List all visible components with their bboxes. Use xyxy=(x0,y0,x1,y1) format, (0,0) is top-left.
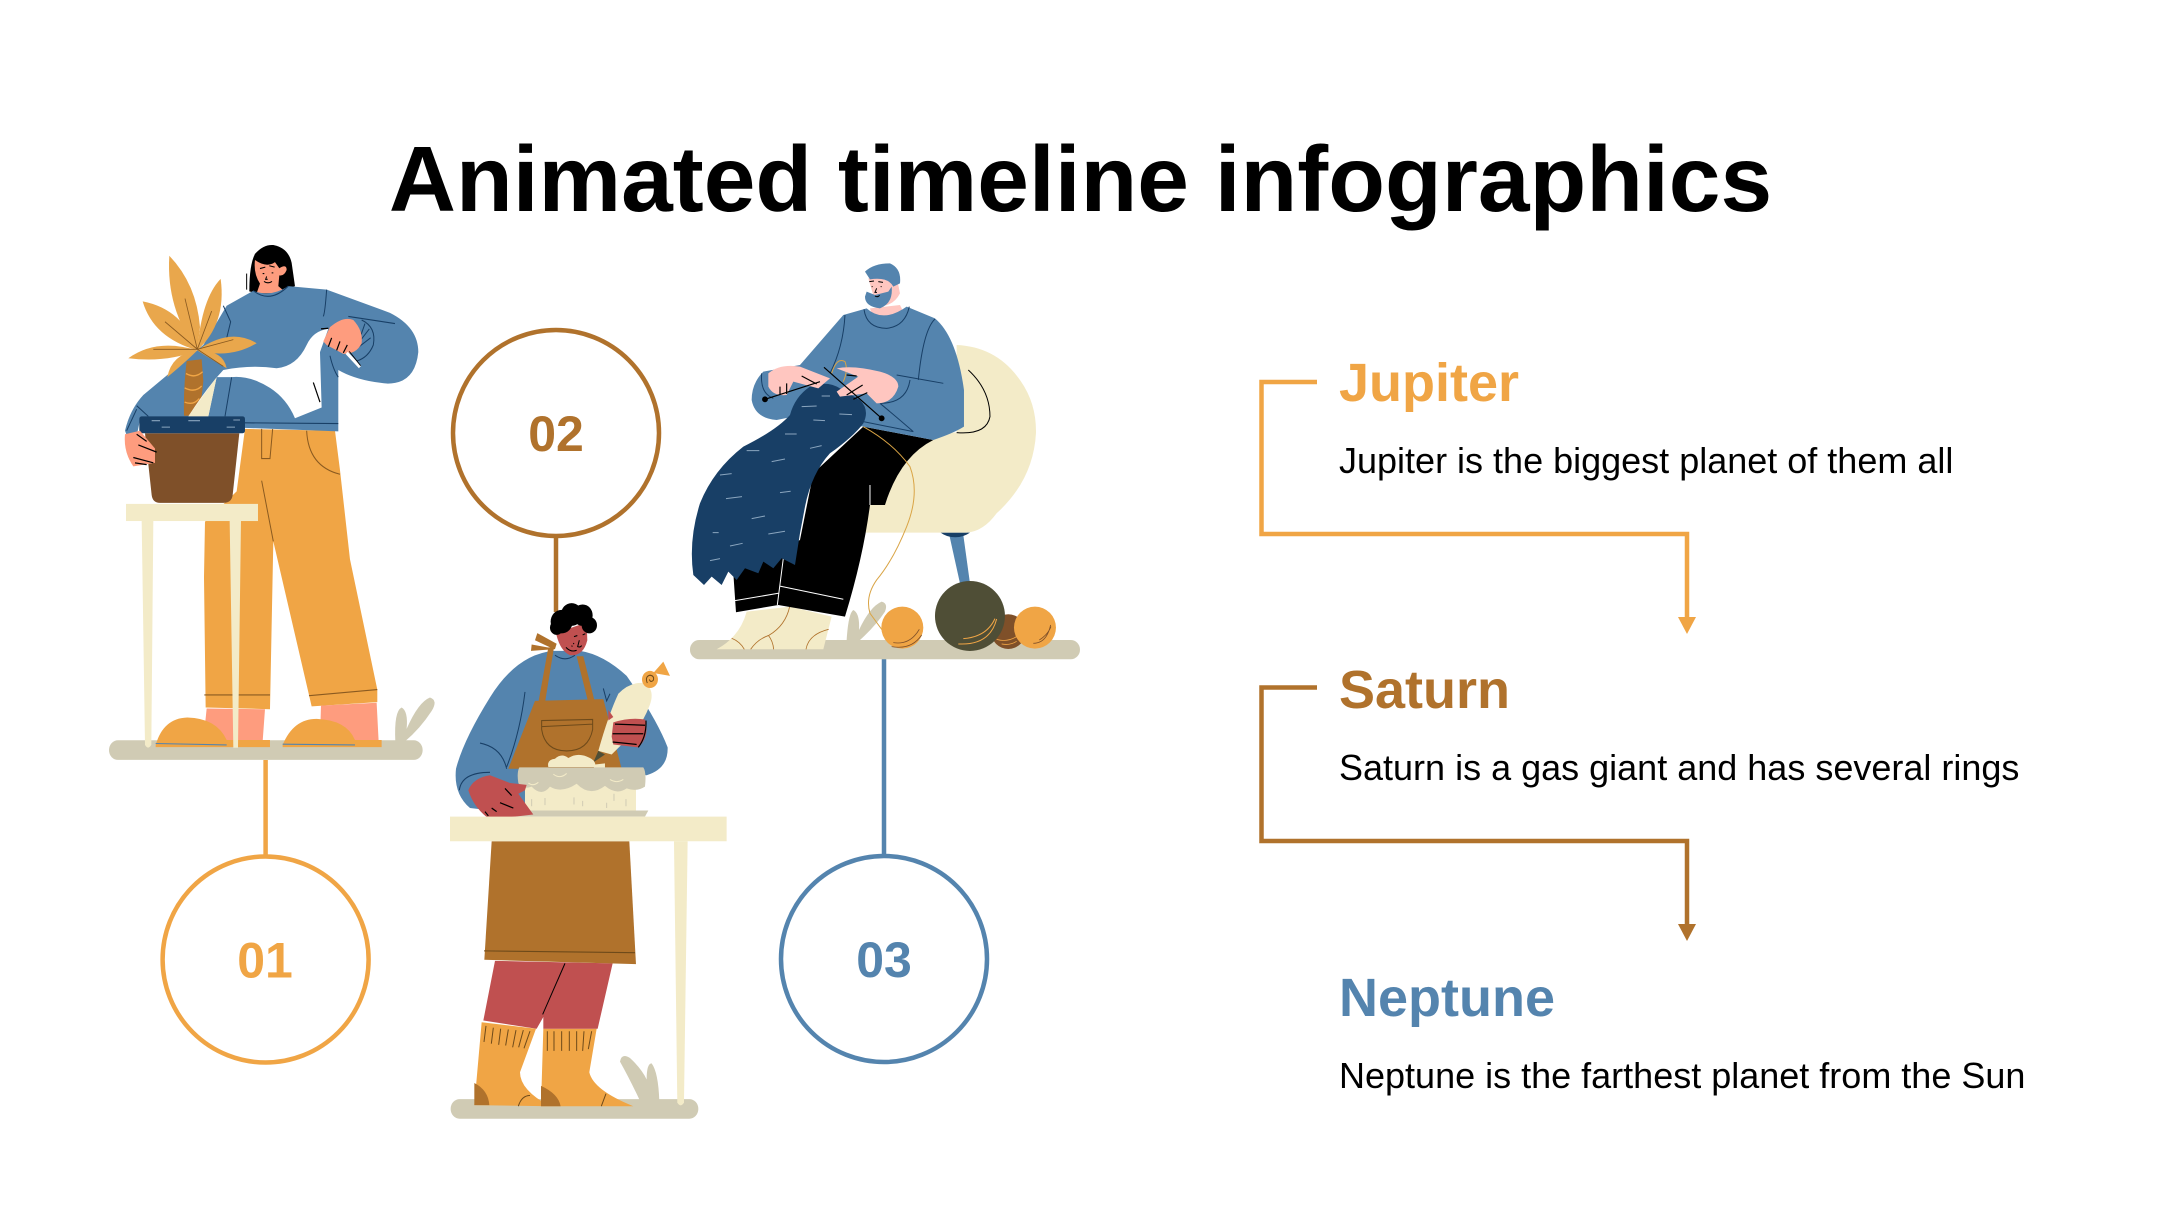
baker's right hand xyxy=(608,710,646,747)
boots xyxy=(474,1022,633,1106)
yarn balls xyxy=(991,614,1026,649)
text block: Neptune: Neptune is the farthest planet from the Sun xyxy=(1339,1055,2025,1096)
blue sweater xyxy=(752,307,964,440)
armchair xyxy=(863,345,1036,533)
face xyxy=(556,622,587,655)
illustration: man knitting in a chair xyxy=(690,263,1080,659)
small table xyxy=(126,504,258,521)
apron skirt xyxy=(484,841,636,964)
blue sweater xyxy=(125,286,418,452)
flower pot xyxy=(145,433,239,503)
knitting yarn loop xyxy=(832,361,846,382)
socks xyxy=(717,607,832,649)
apron bib xyxy=(508,699,622,769)
knitting needles xyxy=(763,367,884,421)
beard and hair xyxy=(865,287,892,308)
shelf xyxy=(451,1099,698,1119)
connector: Saturn to Neptune xyxy=(1262,688,1696,941)
marker 03 with connector xyxy=(781,658,987,1062)
piping bag xyxy=(598,683,652,754)
title: Animated timeline infographics xyxy=(389,127,1772,231)
marker 02 with connector: 02 xyxy=(528,406,584,462)
marker 03 with connector: 03 xyxy=(856,932,912,988)
cake xyxy=(525,783,636,812)
red trousers xyxy=(483,961,613,1029)
text block: Neptune: Neptune xyxy=(1339,968,1555,1028)
whipped cream xyxy=(548,755,595,767)
small plant xyxy=(847,602,886,640)
text block: Jupiter xyxy=(1339,353,1953,481)
hair xyxy=(249,245,295,297)
yarn thread xyxy=(863,427,914,632)
marker 01 with connector: 01 xyxy=(237,932,293,988)
text block: Neptune xyxy=(1339,968,2025,1096)
hands xyxy=(768,366,830,395)
connector: Jupiter to Saturn xyxy=(1262,382,1696,634)
text block: Saturn xyxy=(1339,660,2019,788)
text block: Saturn: Saturn is a gas giant and has several rings xyxy=(1339,747,2019,788)
curly hair xyxy=(550,603,597,635)
small plant xyxy=(620,1056,659,1101)
face details xyxy=(260,266,275,283)
illustration: woman watering a plant xyxy=(109,245,435,760)
blue sweater xyxy=(456,651,668,815)
marker 01 with connector xyxy=(163,760,369,1062)
left hand xyxy=(125,431,155,466)
small plant xyxy=(395,697,435,741)
text block: Jupiter: Jupiter is the biggest planet of them all xyxy=(1339,440,1953,481)
apron bow xyxy=(531,633,557,651)
marker 02 with connector xyxy=(453,330,659,612)
white watering can xyxy=(188,329,328,418)
table leg xyxy=(674,841,688,1105)
shelf xyxy=(109,740,423,760)
work table top xyxy=(450,817,727,841)
legs: orange trousers xyxy=(204,429,377,709)
illustration: baker decorating a cake xyxy=(450,603,727,1119)
neck and head xyxy=(870,305,903,319)
black trousers xyxy=(733,427,933,617)
shelf xyxy=(690,640,1080,659)
knitted blanket xyxy=(692,384,866,585)
face and neck xyxy=(255,260,287,293)
baker's left hand xyxy=(468,775,533,817)
right hand xyxy=(323,319,362,354)
feet xyxy=(203,703,379,741)
plant xyxy=(184,359,203,416)
text block: Saturn: Saturn xyxy=(1339,660,1510,720)
chair leg xyxy=(949,535,970,583)
slippers xyxy=(156,717,382,747)
text block: Jupiter: Jupiter xyxy=(1339,353,1519,413)
plate xyxy=(517,811,648,817)
